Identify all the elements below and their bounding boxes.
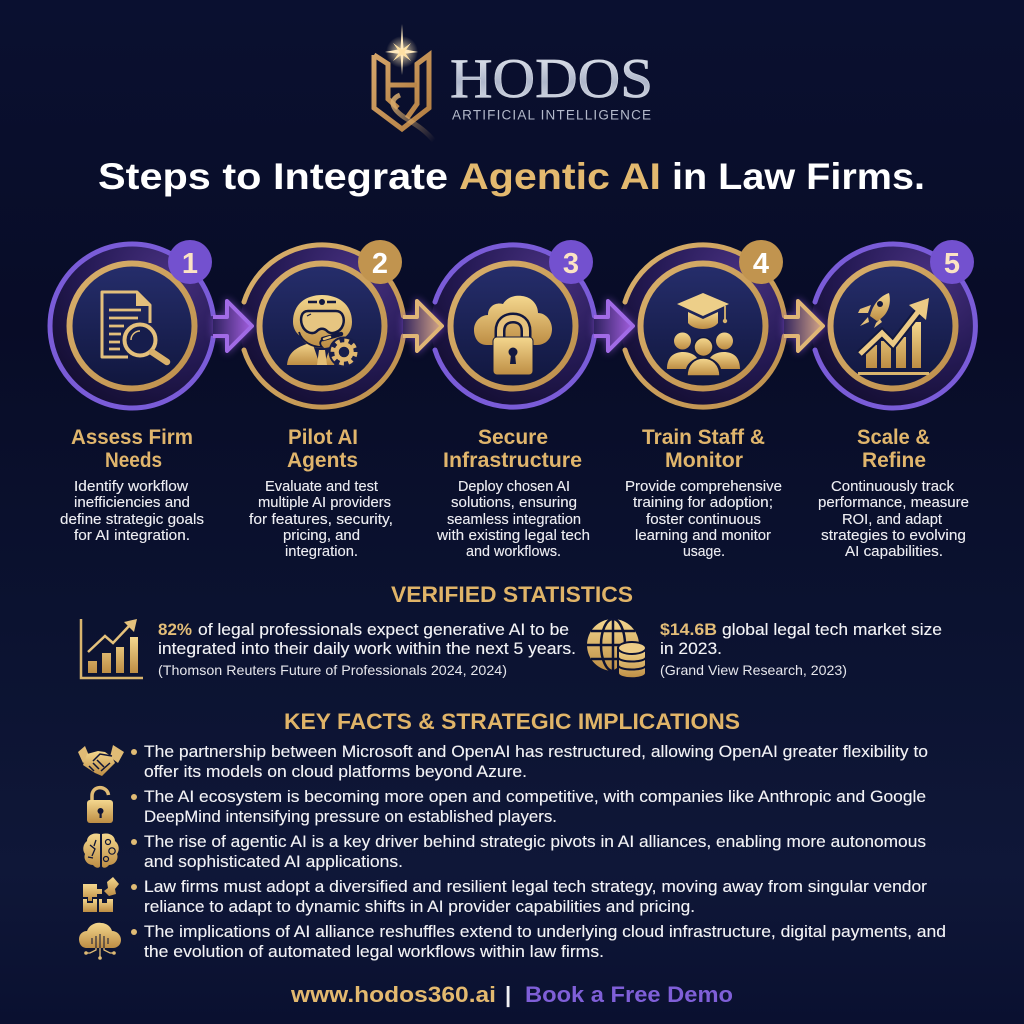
step 1 band [50,244,214,408]
step 3: secure infrastructure [431,240,595,560]
step 4 description: learning and monitor [635,527,771,544]
badge 1: 1 [182,248,198,280]
step 2 description [249,478,393,560]
bullet [131,929,137,935]
text: reliance to adapt to dynamic shifts in AI provider capabilities and pricing. [144,898,695,916]
step 3 description: and workflows. [466,543,561,560]
text: Law firms must adopt a diversified and resilient legal tech strategy, moving away from singular vendor [144,878,928,896]
statistic text [158,621,576,678]
step 5 heading [857,426,930,472]
step 2 band [240,244,404,408]
step 1 description: inefficiencies and [74,494,190,511]
step 5: scale and refine [811,240,975,560]
icon: cloud with padlock [474,296,552,375]
title: in Law Firms. [672,155,925,197]
key fact 5 [79,923,946,961]
step 1 description [60,478,204,544]
wordmark: HODOS [450,48,653,110]
step 2 outer ring [244,245,403,407]
text: and sophisticated AI applications. [144,853,403,871]
step 1 description: for AI integration. [74,527,190,544]
text [144,833,926,871]
title: Agentic AI [459,155,661,197]
step 3 description: solutions, ensuring [451,494,577,511]
icon: star [385,24,418,75]
title [98,155,925,197]
statistic text: global legal tech market size [722,621,942,639]
step 3 inner disc [450,264,576,388]
step 3 description [436,478,590,560]
text [144,878,928,916]
step 1 inner disc [70,264,194,388]
arrow: step 1 to 2 [213,301,252,351]
badge 4: 4 [753,248,769,280]
step 3 heading: Infrastructure [443,449,582,472]
step 1 description: define strategic goals [60,511,204,528]
step 3 description: Deploy chosen AI [458,478,570,495]
step 5 band [811,244,975,408]
step 3 description: with existing legal tech [436,527,590,544]
step 4 inner disc [640,264,766,388]
heading: key facts and strategic implications: KEY FACTS & STRATEGIC IMPLICATIONS [284,709,740,734]
icon: graduation cap and team [667,293,740,376]
step 1 heading: Needs [105,449,162,472]
icon: bar chart with arrow [81,619,143,678]
step 2 description: integration. [285,543,358,560]
statistic text: $14.6B [660,621,717,639]
statistic text: integrated into their daily work within the next 5 years. [158,640,576,658]
footer call to action: | [505,982,511,1007]
footer call to action: www.hodos360.ai [290,982,496,1007]
bullet [131,884,137,890]
text: the evolution of automated legal workflows within law firms. [144,943,604,961]
step 1 heading [71,426,193,472]
text: The implications of AI alliance reshuffles extend to underlying cloud infrastructure, digital payments, and [144,923,946,941]
title: Steps to Integrate [98,155,448,197]
icon: cloud circuit [79,923,121,960]
tagline: ARTIFICIAL INTELLIGENCE [452,108,651,122]
step 2 heading: Agents [287,449,358,472]
text: offer its models on cloud platforms beyond Azure. [144,763,527,781]
text [144,923,946,961]
step 5 description: performance, measure [818,494,969,511]
icon: handshake [78,745,124,776]
icon: globe and coins [587,619,646,678]
step 2 description: multiple AI providers [258,494,391,511]
step 5 heading: Refine [862,449,926,472]
statistic text: 82% [158,621,193,639]
statistic text: in 2023. [660,640,722,658]
step 4: train staff and monitor [621,240,785,560]
text: The rise of agentic AI is a key driver behind strategic pivots in AI alliances, enabling more autonomous [144,833,926,851]
badge 5 [930,240,974,284]
step 4 description: usage. [683,543,725,560]
step 1: assess firm needs [50,240,214,544]
text [144,788,926,826]
step 2: pilot ai agents [240,240,404,560]
icon: rocket and growth chart [858,293,929,375]
key fact 3 [83,833,926,871]
step 4 outer ring [625,245,784,407]
step 5 heading: Scale & [857,426,930,449]
step 2 heading: Pilot AI [288,426,358,449]
step 5 description [818,478,969,560]
bullet [131,794,137,800]
logo [374,24,653,141]
step 5 inner disc [830,264,956,388]
badge 2: 2 [372,248,388,280]
step 5 description: strategies to evolving [821,527,966,544]
step 3 band [431,244,595,408]
step 1 heading: Assess Firm [71,426,193,449]
step 4 heading: Monitor [665,449,743,472]
step 2 description: pricing, and [283,527,360,544]
icon: brain [83,834,119,868]
key fact 1 [78,743,928,781]
footer call to action: Book a Free Demo [525,982,733,1007]
arrow: step 4 to 5 [784,301,823,351]
step 3 heading: Secure [478,426,548,449]
step 5 outer ring [815,244,975,408]
step 4 description: foster continuous [646,511,761,528]
step 5 description: AI capabilities. [845,543,943,560]
icon: pilot with gear [287,295,360,368]
key fact 4 [83,877,928,916]
step 4 description [625,478,782,560]
text: The partnership between Microsoft and OpenAI has restructured, allowing OpenAI greater flexibility to [144,743,928,761]
step 3 heading [443,426,582,472]
key fact 2 [87,788,926,826]
step 4 heading: Train Staff & [642,426,765,449]
statistic text: of legal professionals expect generative AI to be [198,621,569,639]
step 4 description: training for adoption; [633,494,773,511]
text: DeepMind intensifying pressure on established players. [144,808,557,826]
icon: open padlock [87,788,113,823]
step 2 heading [287,426,358,472]
footer call to action [290,982,733,1007]
step 5 description: ROI, and adapt [842,511,943,528]
step 4 heading [642,426,765,472]
icon: document and magnifier [102,292,167,362]
step 2 inner disc [260,264,384,388]
badge 4 [739,240,783,284]
step 1 description: Identify workflow [74,478,188,495]
step 3 outer ring [435,245,594,407]
arrow: step 2 to 3 [403,301,442,351]
bullet [131,749,137,755]
arrow: step 3 to 4 [594,301,633,351]
statistic text: (Thomson Reuters Future of Professionals 2024, 2024) [158,662,507,678]
step 4 band [621,244,785,408]
step 5 description: Continuously track [831,478,954,495]
statistic text [660,621,942,678]
statistic: 14.6B market [587,619,942,678]
badge 5: 5 [944,248,960,280]
statistic: 82 percent [81,619,576,678]
step 1 outer ring [50,244,213,408]
step 2 description: Evaluate and test [265,478,379,495]
text [144,743,928,781]
badge 1 [168,240,212,284]
step 3 description: seamless integration [447,511,581,528]
icon: shield monogram [374,55,434,141]
badge 3 [549,240,593,284]
icon: puzzle pieces [83,877,119,912]
statistic text: (Grand View Research, 2023) [660,662,847,678]
step 2 description: for features, security, [249,511,393,528]
badge 2 [358,240,402,284]
badge 3: 3 [563,248,579,280]
bullet [131,839,137,845]
text: The AI ecosystem is becoming more open and competitive, with companies like Anthropic and Google [144,788,926,806]
step 4 description: Provide comprehensive [625,478,782,495]
heading: verified statistics: VERIFIED STATISTICS [391,582,633,607]
